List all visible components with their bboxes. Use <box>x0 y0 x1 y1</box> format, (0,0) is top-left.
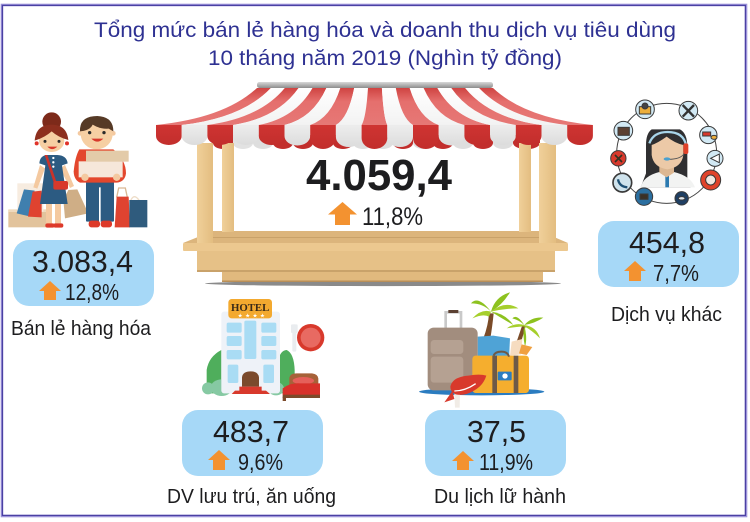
title: 10 tháng năm 2019 (Nghìn tỷ đồng) <box>208 46 562 70</box>
retail value box: 3.083,4 <box>32 244 133 279</box>
palm trees <box>471 292 543 347</box>
stall shadow <box>205 281 561 286</box>
water shadow <box>419 388 544 395</box>
icon: hotel <box>202 299 324 401</box>
red sun hat <box>444 375 486 408</box>
title <box>94 18 676 70</box>
shopping boxes and bags, left <box>8 183 88 227</box>
title: Tổng mức bán lẻ hàng hóa và doanh thu dịch vụ tiêu dùng <box>94 18 676 42</box>
other services value box <box>598 221 739 287</box>
back awning scallops <box>213 135 540 149</box>
service ring <box>617 103 717 203</box>
retail label: Bán lẻ hàng hóa <box>11 317 152 340</box>
man <box>74 116 129 227</box>
stall posts <box>197 143 556 243</box>
yellow suitcase <box>472 352 529 393</box>
icon: bed <box>283 373 320 401</box>
total growth <box>328 202 423 231</box>
stall counter <box>183 231 568 282</box>
retail value box: 12,8% <box>65 279 119 305</box>
other services value box: 454,8 <box>629 225 705 260</box>
total growth: 11,8% <box>362 203 423 231</box>
accommodation label: DV lưu trú, ăn uống <box>167 485 336 508</box>
travel value box <box>425 410 566 476</box>
icon: plate and fork <box>291 324 324 352</box>
building <box>221 312 280 394</box>
icon: call-centre agent <box>611 100 723 205</box>
other services label: Dịch vụ khác <box>611 303 722 326</box>
hotel sign <box>228 299 272 320</box>
icon: shoppers <box>8 112 147 228</box>
accommodation value box: 483,7 <box>213 414 289 449</box>
map and tickets <box>478 336 532 358</box>
awning scallops <box>156 125 593 149</box>
awning top bar <box>257 82 493 88</box>
hotel sign: ★★★★ <box>238 313 265 320</box>
retail value box <box>13 240 154 306</box>
hotel sign: HOTEL <box>231 303 270 314</box>
shopping bags, right <box>115 188 147 227</box>
small service icons <box>611 100 723 205</box>
accommodation value box: 9,6% <box>238 449 283 475</box>
total value: 4.059,4 <box>306 151 453 200</box>
accommodation value box <box>182 410 323 476</box>
travel value box: 37,5 <box>467 414 526 449</box>
market stall illustration <box>156 82 593 286</box>
brown suitcase <box>428 310 478 390</box>
awning stripes <box>156 88 593 125</box>
travel value box: 11,9% <box>479 449 533 475</box>
trees <box>202 350 295 396</box>
agent <box>641 129 695 187</box>
other services value box: 7,7% <box>653 260 699 286</box>
woman <box>33 112 74 228</box>
travel label: Du lịch lữ hành <box>434 485 566 508</box>
icon: travel luggage <box>419 292 544 408</box>
